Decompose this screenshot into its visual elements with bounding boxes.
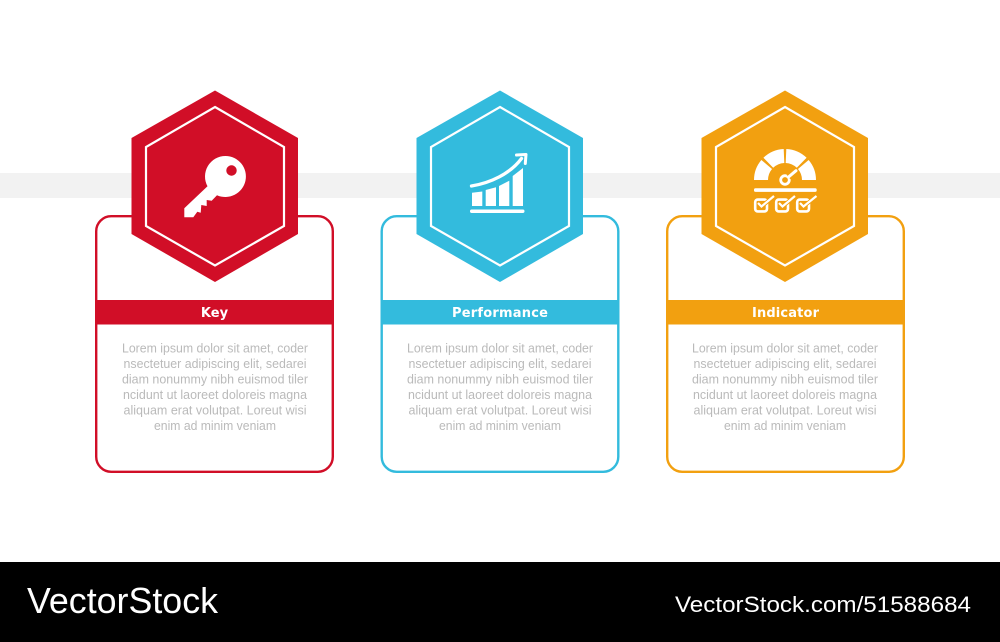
text block: Key: diam nonummy nibh euismod tiler bbox=[122, 372, 309, 386]
text block: Indicator: diam nonummy nibh euismod tiler bbox=[692, 372, 879, 386]
text block: Performance: diam nonummy nibh euismod tiler bbox=[407, 372, 594, 386]
panel: Indicator bbox=[667, 90, 904, 472]
footer image id: VectorStock.com/51588684 bbox=[675, 592, 971, 617]
heading band: Indicator bbox=[667, 300, 904, 324]
text block: Key: Lorem ipsum dolor sit amet, coder bbox=[122, 340, 309, 356]
panel: Performance bbox=[382, 90, 618, 472]
card outline: Indicator bbox=[667, 216, 904, 472]
hexagon: Indicator bbox=[702, 90, 868, 282]
card outline: Key bbox=[96, 216, 333, 472]
heading band: Key: Key bbox=[201, 306, 229, 321]
text block: Indicator: nsectetuer adipiscing elit, sedarei bbox=[694, 356, 877, 371]
heading band: Performance: Performance bbox=[452, 306, 548, 321]
background band bbox=[0, 173, 1000, 198]
text block: Key: aliquam erat volutpat. Loreut wisi bbox=[124, 402, 307, 418]
text block: Key: nsectetuer adipiscing elit, sedarei bbox=[124, 356, 307, 371]
text block: Performance: Lorem ipsum dolor sit amet, coder bbox=[407, 340, 594, 356]
text block: Key bbox=[122, 340, 309, 433]
icon: gauge with checkboxes bbox=[754, 156, 817, 211]
icon: key bbox=[184, 156, 246, 217]
hexagon: Performance bbox=[416, 90, 583, 282]
text block: Indicator: aliquam erat volutpat. Loreut wisi bbox=[694, 402, 877, 418]
icon: growth chart bbox=[470, 154, 526, 213]
text block: Indicator: enim ad minim veniam bbox=[724, 418, 846, 433]
card outline: Performance bbox=[382, 216, 618, 472]
text block: Indicator: ncidunt ut laoreet doloreis magna bbox=[693, 387, 878, 402]
panel: Key bbox=[96, 90, 333, 472]
text block: Performance: enim ad minim veniam bbox=[439, 418, 561, 433]
text block: Indicator bbox=[692, 340, 879, 433]
heading band: Key bbox=[96, 300, 333, 324]
text block: Performance: nsectetuer adipiscing elit, sedarei bbox=[408, 356, 592, 371]
text block: Performance: ncidunt ut laoreet doloreis magna bbox=[408, 387, 593, 402]
hexagon: Key bbox=[132, 90, 298, 282]
footer logo: VectorStock bbox=[27, 580, 219, 621]
text block: Key: enim ad minim veniam bbox=[154, 418, 276, 433]
text block: Key: ncidunt ut laoreet doloreis magna bbox=[123, 387, 308, 402]
heading band: Indicator: Indicator bbox=[752, 306, 820, 321]
text block: Performance bbox=[407, 340, 594, 433]
heading band: Performance bbox=[382, 300, 618, 324]
text block: Indicator: Lorem ipsum dolor sit amet, coder bbox=[692, 340, 879, 356]
footer bar bbox=[0, 562, 1000, 642]
text block: Performance: aliquam erat volutpat. Loreut wisi bbox=[408, 402, 592, 418]
